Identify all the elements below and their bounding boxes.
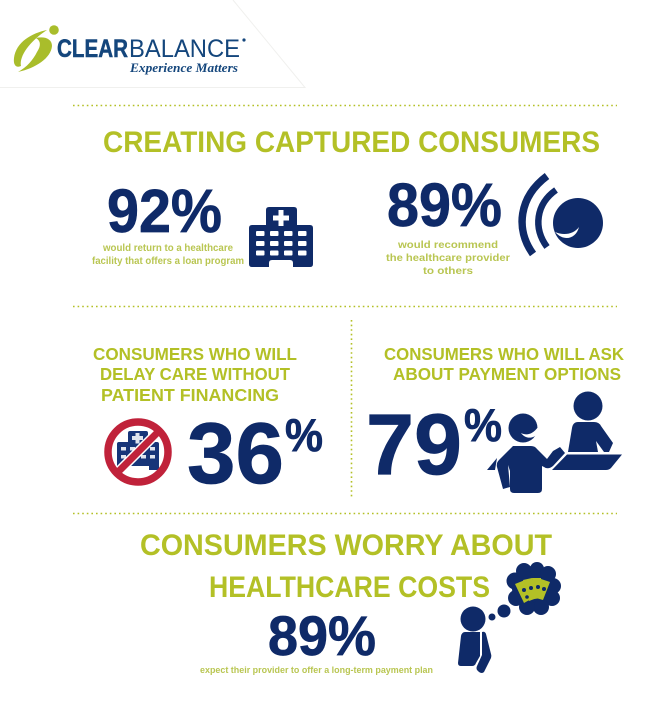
stat: 89 percent recommend: the healthcare provider xyxy=(386,253,510,264)
stat: 92 percent return: would return to a healthcare xyxy=(102,243,233,254)
stat: 89 percent recommend: to others xyxy=(423,266,474,277)
stat: 79 percent: % xyxy=(464,399,502,451)
icon: speaking head xyxy=(522,176,603,254)
title: CREATING CAPTURED CONSUMERS xyxy=(103,126,600,159)
heading: delay care xyxy=(93,344,297,405)
heading: payment options: ABOUT PAYMENT OPTIONS xyxy=(393,364,621,384)
stat: 92 percent return xyxy=(92,177,244,267)
logo xyxy=(14,25,246,75)
stat: 89 percent recommend xyxy=(386,171,510,277)
stat: 36 percent: % xyxy=(285,409,323,461)
heading: delay care: PATIENT FINANCING xyxy=(101,385,279,405)
stat: 89 percent payment plan xyxy=(200,604,433,675)
heading: worry about costs: HEALTHCARE COSTS xyxy=(209,571,490,604)
stat: 92 percent return: 92% xyxy=(107,177,222,245)
logo: Experience Matters xyxy=(129,61,238,75)
stat: 89 percent payment plan: expect their provider to offer a long-term payment plan xyxy=(200,665,433,675)
heading: payment options: CONSUMERS WHO WILL ASK xyxy=(384,344,624,364)
stat: 79 percent: 79 xyxy=(366,397,462,493)
icon: consultation xyxy=(487,392,622,493)
heading: delay care: CONSUMERS WHO WILL xyxy=(93,344,297,364)
icon: person worrying about money xyxy=(458,562,561,673)
stat: 89 percent recommend: 89% xyxy=(387,171,502,239)
stat: 89 percent recommend: would recommend xyxy=(397,240,498,251)
logo: CLEAR xyxy=(57,35,128,63)
icon: no hospital xyxy=(108,422,168,482)
heading: worry about costs xyxy=(140,529,552,604)
logo: BALANCE xyxy=(129,35,240,63)
heading: worry about costs: CONSUMERS WORRY ABOUT xyxy=(140,529,552,562)
icon: hospital xyxy=(249,207,313,267)
stat: 36 percent: 36 xyxy=(187,406,284,502)
heading: delay care: DELAY CARE WITHOUT xyxy=(100,364,290,384)
stat: 89 percent payment plan: 89% xyxy=(268,604,376,667)
heading: payment options xyxy=(384,344,624,384)
stat: 92 percent return: facility that offers a loan program xyxy=(92,256,244,267)
